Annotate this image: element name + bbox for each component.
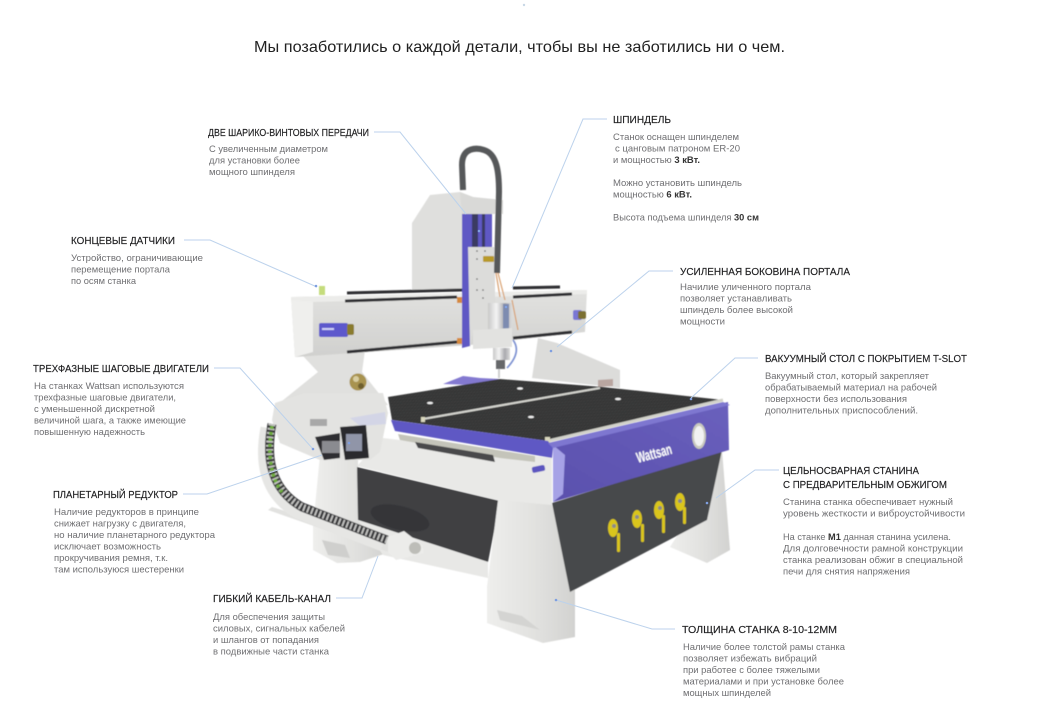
callout: cable channel: силовых, сигнальных кабелей <box>213 624 345 634</box>
callout: welded frame: уровень жесткости и виброустойчивости <box>783 508 965 520</box>
icon: brass knob <box>350 374 366 390</box>
rear right leg <box>670 450 730 563</box>
callout: vacuum table: ВАКУУМНЫЙ СТОЛ С ПОКРЫТИЕМ T-SLOT <box>765 352 968 365</box>
callout: planetary reducer: там используюся шестеренки <box>54 564 184 576</box>
callout: limit sensors: КОНЦЕВЫЕ ДАТЧИКИ <box>71 235 175 247</box>
icon: yellow handles <box>608 493 686 552</box>
callout: welded frame <box>783 465 965 578</box>
callout: welded frame: станка реализован обжиг в специальной <box>783 555 963 566</box>
leader: stepper motors <box>214 368 314 450</box>
callout: frame thickness: мощных шпинделей <box>683 688 771 699</box>
callout: ball screws <box>208 127 369 178</box>
leader: ball screws <box>374 132 480 232</box>
CNC machine illustration <box>266 149 730 643</box>
callout: stepper motors: с уменьшенной дискретной <box>34 404 155 415</box>
vacuum table <box>388 379 723 444</box>
callout: spindle: мощностью 6 кВт. <box>613 190 692 200</box>
side lower rail <box>358 520 488 578</box>
callout: frame thickness: Наличие более толстой рамы станка <box>683 642 846 653</box>
callout: gantry side wall <box>680 266 850 328</box>
callout: ball screws: С увеличенным диаметром <box>209 144 328 155</box>
icon: stepper motor and gearbox <box>315 425 369 460</box>
callout: vacuum table: поверхности без использования <box>765 394 907 405</box>
callout: limit sensors: перемещение портала <box>71 264 171 276</box>
callout: cable channel <box>213 592 345 658</box>
gantry rear plate <box>412 192 473 290</box>
callout: planetary reducer: Наличие редукторов в принципе <box>54 507 199 518</box>
callout: spindle: и мощностью 3 кВт. <box>613 155 700 166</box>
callout: gantry side wall: Начилие уличенного портала <box>680 282 812 293</box>
blue motor mount right <box>573 310 586 320</box>
callout: gantry side wall: позволяет устанавливать <box>680 294 792 304</box>
rear left leg <box>313 455 387 563</box>
callout: stepper motors <box>33 363 209 438</box>
left carriage housing <box>272 393 388 460</box>
side dark panel <box>357 467 500 562</box>
leader: thickness <box>555 599 675 629</box>
callout: planetary reducer: но наличие планетарного редуктора <box>54 530 216 541</box>
callout: frame thickness: материалами и при установке более <box>683 676 844 688</box>
callout: vacuum table <box>765 352 968 416</box>
leader: reducer <box>183 442 350 494</box>
callout: planetary reducer: снижает нагрузку с двигателя, <box>54 518 186 530</box>
callout: spindle <box>613 114 759 224</box>
callout: ball screws: ДВЕ ШАРИКО-ВИНТОВЫХ ПЕРЕДАЧИ <box>208 127 369 139</box>
callout: limit sensors <box>71 235 203 287</box>
callout: planetary reducer: прокручивания ремня, т.к. <box>54 553 168 564</box>
z-axis top cap <box>460 192 503 214</box>
callout: stepper motors: трехфазные шаговые двигатели, <box>34 392 176 404</box>
side frame rail <box>357 434 552 510</box>
hose <box>462 149 499 273</box>
front dark panel <box>552 450 722 592</box>
callout: cable channel: и шлангов от попадания <box>213 635 319 646</box>
callout: planetary reducer: исключает возможность <box>54 542 161 552</box>
z-axis blue column <box>457 214 492 348</box>
wires <box>496 273 518 330</box>
callout: vacuum table: обрабатываемый материал на рабочей <box>765 382 937 394</box>
callout: cable channel: в подвижные части станка <box>213 646 330 658</box>
callout: planetary reducer <box>53 488 216 576</box>
gantry left upright <box>277 350 388 405</box>
front leg <box>487 500 575 643</box>
callout: welded frame: С ПРЕДВАРИТЕЛЬНЫМ ОБЖИГОМ <box>783 479 947 491</box>
callout: frame thickness <box>682 624 846 699</box>
leader: cable channel <box>336 556 378 598</box>
callout: cable channel: ГИБКИЙ КАБЕЛЬ-КАНАЛ <box>213 592 331 605</box>
gantry beam <box>291 290 587 357</box>
leader: frame <box>706 470 779 504</box>
leader: limit sensors <box>184 240 317 287</box>
title: Мы позаботились о каждой детали, чтобы вы не заботились ни о чем. <box>254 39 785 56</box>
callout: stepper motors: На станках Wattsan используются <box>34 381 184 392</box>
callout: stepper motors: величиной шага, а также имеющие <box>34 416 186 426</box>
callout: stepper motors: ТРЕХФАЗНЫЕ ШАГОВЫЕ ДВИГАТЕЛИ <box>33 363 209 375</box>
callout: welded frame: печи для снятия напряжения <box>783 566 910 578</box>
icon: limit sensor <box>319 286 325 295</box>
top dot <box>523 4 525 6</box>
callout: spindle: с цанговым патроном ER-20 <box>615 144 740 154</box>
callout: welded frame: Станина станка обеспечивает нужный <box>783 497 953 508</box>
callout: limit sensors: Устройство, ограничивающие <box>71 253 203 264</box>
front blue panel <box>548 402 730 502</box>
callout: ball screws: мощного шпинделя <box>209 167 295 178</box>
callout: frame thickness: ТОЛЩИНА СТАНКА 8-10-12ММ <box>682 624 837 636</box>
callout: welded frame: На станке М1 данная станина усилена. <box>783 532 951 543</box>
callout: spindle: Станок оснащен шпинделем <box>613 132 739 143</box>
callout: limit sensors: по осям станка <box>71 276 137 287</box>
leader: side wall <box>550 271 673 352</box>
icon: gauge <box>692 423 706 449</box>
blue motor mount left <box>319 323 354 337</box>
callout: gantry side wall: УСИЛЕННАЯ БОКОВИНА ПОРТАЛА <box>680 266 850 278</box>
callout: cable channel: Для обеспечения защиты <box>213 612 325 623</box>
callout: frame thickness: при работее с более тяжелыми <box>683 665 820 676</box>
logo: Wattsan: Wattsan <box>635 441 674 467</box>
callout: ball screws: для установки более <box>209 156 300 166</box>
spindle <box>473 303 516 378</box>
callout: vacuum table: дополнительных приспособлений. <box>765 406 918 416</box>
leader: spindle <box>505 119 607 308</box>
callout: gantry side wall: мощности <box>680 316 725 328</box>
callout: vacuum table: Вакуумный стол, который закрепляет <box>765 371 930 382</box>
callout: gantry side wall: шпиндель более высокой <box>680 305 793 316</box>
callout: frame thickness: позволяет избежать вибраций <box>683 654 817 664</box>
callout: spindle: Высота подъема шпинделя 30 см <box>613 212 759 224</box>
callout: planetary reducer: ПЛАНЕТАРНЫЙ РЕДУКТОР <box>53 488 178 501</box>
table back rail <box>443 376 500 385</box>
gantry right upright <box>532 338 620 388</box>
cable chain end block <box>388 531 424 560</box>
callout: stepper motors: повышенную надежность <box>34 427 145 438</box>
cable chain guide plate <box>268 507 390 552</box>
leader lines <box>183 119 779 629</box>
callout: spindle: Можно установить шпиндель <box>613 178 742 189</box>
gantry rails <box>345 287 572 352</box>
cable chain <box>266 424 387 544</box>
z-axis carriage plate <box>468 247 495 348</box>
leader: vacuum table <box>690 358 758 400</box>
callout: spindle: ШПИНДЕЛЬ <box>613 114 671 126</box>
callout: welded frame: Для долговечности рамной конструкции <box>783 544 963 554</box>
blue side strip <box>391 420 553 458</box>
callout: welded frame: ЦЕЛЬНОСВАРНАЯ СТАНИНА <box>783 465 919 477</box>
